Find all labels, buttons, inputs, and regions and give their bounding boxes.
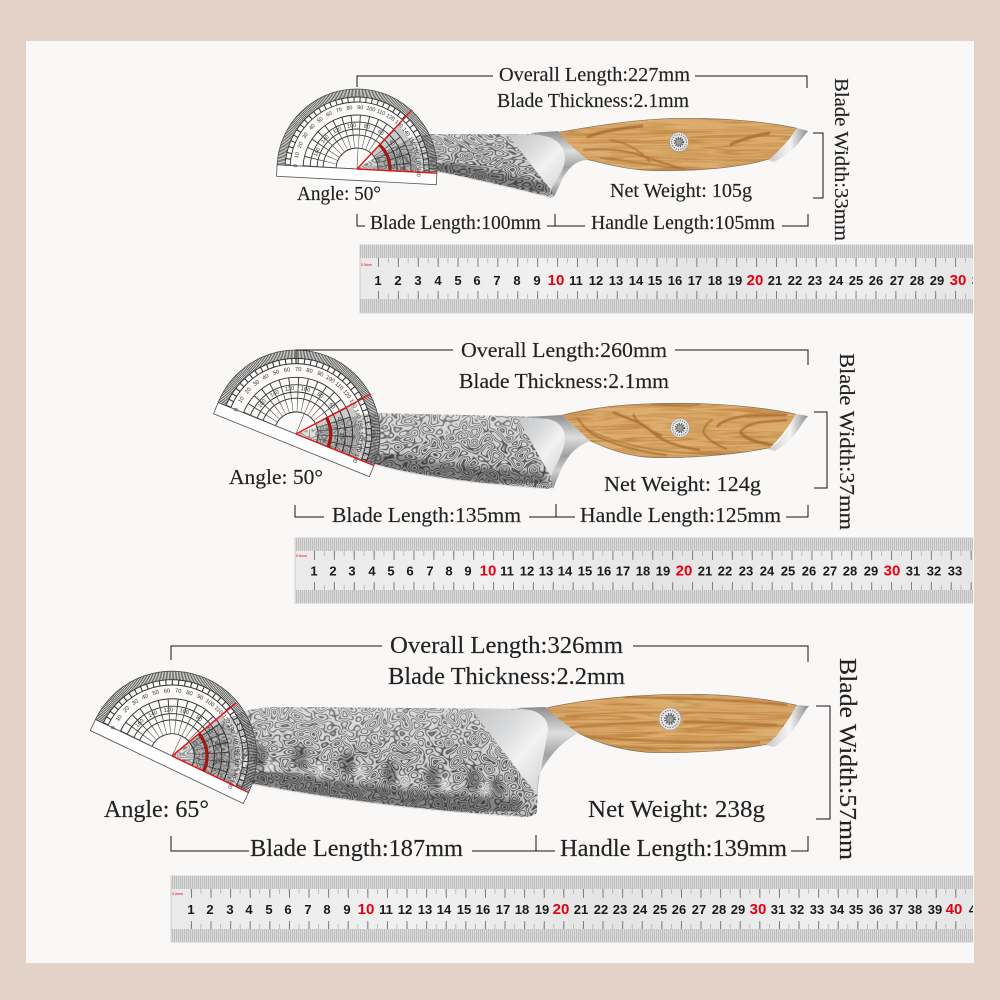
ruler 1: 25	[849, 273, 863, 288]
labels knife 2: Handle Length:125mm	[580, 503, 781, 527]
protractor 1: 40	[308, 123, 317, 132]
protractor 1: 80	[346, 105, 353, 112]
ruler 1: 3	[414, 273, 422, 288]
dimension lines knife 3	[171, 646, 830, 851]
ruler 2: 11	[500, 564, 514, 578]
ruler 3: 10	[358, 901, 374, 918]
protractor 1: 100	[347, 123, 357, 130]
ruler 2: 0.5mm	[296, 554, 307, 558]
ruler 3: 19	[535, 902, 549, 917]
handle 3 wood	[545, 694, 797, 753]
ruler 3: 8	[323, 902, 331, 917]
ruler 1: 22	[788, 273, 802, 288]
ruler 3: 2	[206, 902, 214, 917]
ruler 1: 17	[688, 273, 702, 288]
protractor 2: 20	[244, 387, 253, 396]
ruler 1: 11	[569, 273, 583, 288]
ruler 3: 13	[418, 902, 432, 917]
ruler 1: 1	[374, 273, 382, 288]
labels knife 2: Net Weight: 124g	[604, 472, 761, 496]
ruler 2: 18	[636, 564, 650, 578]
protractor 2	[214, 325, 405, 477]
protractor 3: 30	[131, 698, 140, 707]
ruler 1	[360, 245, 986, 313]
protractor 3: 70	[175, 688, 182, 695]
ruler 3: 16	[476, 902, 490, 917]
ruler 2: 19	[656, 564, 670, 578]
protractor 2: 120	[285, 386, 295, 393]
ruler 2: 1	[310, 564, 318, 578]
protractor 2: 180	[351, 452, 360, 463]
ruler 3: 38	[908, 902, 922, 917]
rivet 3	[659, 708, 681, 730]
ruler 2: 16	[597, 564, 611, 578]
ruler 3: 35	[849, 902, 863, 917]
ruler 2	[295, 538, 974, 603]
ruler 2: 9	[464, 564, 472, 578]
protractor 2: 100	[324, 375, 336, 385]
polished steel 3	[470, 708, 548, 795]
labels knife 1: Handle Length:105mm	[591, 212, 775, 234]
labels knife 1: Blade Width:33mm	[830, 78, 852, 241]
labels knife 3: Blade Thickness:2.2mm	[388, 664, 625, 690]
protractor 2: 50	[272, 369, 280, 377]
ruler 2: 21	[698, 564, 712, 578]
labels knife 2: Angle: 50°	[229, 465, 323, 489]
ruler 3: 26	[672, 902, 686, 917]
ruler 2: 23	[739, 564, 753, 578]
labels knife 2: Blade Width:37mm	[835, 353, 859, 530]
ruler 3	[171, 876, 983, 942]
protractor 2: 130	[348, 398, 357, 410]
protractor 2: 40	[262, 373, 270, 382]
ruler 1: 14	[629, 273, 644, 288]
ruler 1: 29	[930, 273, 944, 288]
protractor 2: 120	[341, 389, 352, 400]
protractor 3: 90	[196, 694, 204, 702]
ruler 2: 6	[406, 564, 414, 578]
protractor 1: 80	[363, 124, 370, 131]
ruler 2: 14	[558, 564, 573, 578]
protractor 1: 180	[415, 168, 421, 177]
labels knife 1: Blade Thickness:2.1mm	[497, 90, 689, 112]
ruler 1: 13	[609, 273, 623, 288]
ruler 3: 7	[304, 902, 312, 917]
protractor 2: 70	[295, 367, 301, 373]
protractor 3: 0	[110, 725, 117, 731]
ruler 3: 25	[653, 902, 667, 917]
protractor 3: 110	[213, 705, 223, 716]
labels knife 3: Net Weight: 238g	[588, 797, 765, 823]
protractor 1: 140	[401, 127, 411, 138]
protractor 2: 80	[306, 368, 313, 375]
ruler 2: 7	[426, 564, 434, 578]
ruler 3: 28	[712, 902, 726, 917]
ruler 1: 16	[668, 273, 682, 288]
ruler 2: 27	[823, 564, 837, 578]
protractor 3	[90, 643, 285, 804]
ruler 3: 36	[869, 902, 883, 917]
protractor 2: 100	[300, 386, 311, 394]
rivet 1	[670, 132, 688, 152]
ruler 3: 12	[398, 902, 412, 917]
ruler 1: 5	[454, 273, 462, 288]
ruler 2: 25	[781, 564, 795, 578]
labels knife 2	[229, 338, 859, 530]
ruler 3: 22	[594, 902, 608, 917]
ruler 3: 4	[245, 902, 253, 917]
protractor 3: 140	[148, 710, 159, 719]
protractor 2: 140	[353, 409, 361, 420]
handle 2 wood	[562, 403, 796, 458]
protractor 3: 130	[226, 724, 235, 735]
protractor 1: 100	[366, 106, 376, 113]
ruler 1: 0.5mm	[361, 263, 372, 267]
ruler 2: 2	[329, 564, 337, 578]
protractor 3: 100	[179, 708, 190, 716]
protractor 1: 140	[320, 134, 331, 145]
ruler 2: 13	[539, 564, 553, 578]
ruler 2: 33	[948, 564, 962, 578]
protractor 1: 160	[411, 146, 420, 156]
labels knife 2: Blade Thickness:2.1mm	[459, 369, 669, 393]
ruler 2: 26	[802, 564, 816, 578]
protractor 1: 10	[294, 152, 301, 159]
angle marker 1	[357, 107, 440, 173]
ruler 1: 27	[890, 273, 904, 288]
ruler 3: 21	[574, 902, 588, 917]
protractor 3: 100	[204, 698, 215, 709]
ruler 2: 8	[445, 564, 453, 578]
protractor 1: 60	[376, 129, 385, 137]
ruler 2: 32	[927, 564, 941, 578]
butt cap 1	[768, 128, 808, 162]
ruler 2: 20	[676, 562, 692, 580]
ruler 2: 17	[616, 564, 630, 578]
ruler 1: 20	[747, 272, 763, 289]
ruler 2: 30	[884, 562, 900, 580]
protractor 1: 160	[313, 147, 322, 158]
protractor 2: 40	[335, 416, 343, 424]
protractor 1: 40	[387, 139, 396, 147]
labels knife 3: Blade Length:187mm	[250, 836, 463, 862]
ruler 1: 21	[768, 273, 782, 288]
angle marker 3	[172, 688, 281, 793]
protractor 1: 70	[335, 107, 343, 114]
ruler 1: 2	[394, 273, 402, 288]
bolster 3	[515, 707, 578, 795]
butt cap 2	[768, 414, 808, 451]
protractor 2: 90	[316, 371, 324, 379]
ruler 1: 30	[950, 272, 966, 289]
protractor 1: 170	[414, 157, 421, 166]
ruler 1: 10	[548, 272, 564, 289]
protractor 3: 60	[164, 688, 170, 695]
protractor 2: 60	[284, 367, 291, 374]
rivet 2	[670, 418, 690, 438]
ruler 3: 3	[226, 902, 234, 917]
blade 1 damascus	[358, 134, 565, 198]
bolster 2	[525, 415, 590, 489]
protractor 3: 60	[205, 726, 214, 735]
labels knife 3: Handle Length:139mm	[560, 836, 787, 862]
labels knife 3: Overall Length:326mm	[390, 633, 623, 659]
ruler 3: 29	[731, 902, 745, 917]
ruler 2: 4	[368, 564, 376, 578]
ruler 3: 17	[496, 902, 510, 917]
polished steel 2	[517, 417, 565, 477]
ruler 3: 11	[379, 902, 393, 917]
protractor 2: 160	[357, 431, 363, 441]
dimension lines knife 2	[295, 350, 827, 517]
ruler 1: 24	[829, 273, 844, 288]
protractor 2: 110	[333, 381, 344, 392]
labels knife 1: Angle: 50°	[297, 183, 381, 205]
ruler 3: 20	[553, 901, 569, 918]
ruler 3: 9	[343, 902, 351, 917]
ruler 3: 40	[946, 901, 962, 918]
ruler 1: 4	[434, 273, 442, 288]
protractor 1	[277, 85, 441, 185]
ruler 1: 8	[513, 273, 521, 288]
labels knife 1: Net Weight: 105g	[610, 180, 752, 202]
protractor 2: 160	[257, 398, 268, 409]
ruler 3: 32	[790, 902, 804, 917]
protractor 1: 30	[302, 132, 310, 140]
protractor 3: 50	[152, 690, 160, 697]
ruler 3: 41	[969, 902, 983, 917]
protractor 3: 40	[212, 741, 220, 748]
protractor 3: 150	[233, 746, 240, 756]
knife 1: paring knife	[358, 118, 808, 198]
labels knife 2: Overall Length:260mm	[461, 338, 667, 362]
protractor 2: 30	[252, 379, 261, 388]
ruler 3: 34	[830, 902, 845, 917]
protractor 3: 180	[226, 778, 235, 789]
ruler 3: 23	[613, 902, 627, 917]
protractor 1: 110	[376, 108, 386, 117]
ruler 1: 26	[869, 273, 883, 288]
angle marker 2	[296, 374, 398, 465]
ruler 1: 15	[648, 273, 662, 288]
ruler 2: 5	[387, 564, 395, 578]
protractor 1: 20	[297, 141, 305, 149]
protractor 3: 170	[230, 768, 238, 779]
labels knife 3: Blade Width:57mm	[834, 658, 860, 860]
protractor 1: 20	[394, 153, 402, 160]
protractor 2: 60	[327, 402, 336, 411]
ruler 3: 1	[187, 902, 195, 917]
protractor 3: 120	[220, 714, 230, 725]
ruler 1: 7	[493, 273, 501, 288]
ruler 3: 6	[284, 902, 292, 917]
ruler 3: 27	[692, 902, 706, 917]
protractor 2: 10	[238, 396, 246, 404]
protractor 1: 0	[293, 164, 299, 167]
ruler 2: 12	[520, 564, 534, 578]
ruler 2: 28	[843, 564, 857, 578]
protractor 3: 80	[185, 690, 193, 697]
ruler 2: 22	[718, 564, 732, 578]
protractor 2: 0	[233, 407, 240, 413]
protractor 3: 80	[194, 715, 203, 723]
ruler 2: 24	[760, 564, 775, 578]
knife 3: santoku knife	[165, 690, 809, 825]
protractor 2: 170	[355, 442, 363, 453]
ruler 2: 29	[864, 564, 878, 578]
protractor 2: 150	[356, 420, 363, 430]
ruler 1: 18	[708, 273, 722, 288]
ruler 3: 37	[889, 902, 903, 917]
protractor 1: 60	[325, 111, 333, 119]
ruler 3: 0.5mm	[172, 892, 183, 896]
knife 2: utility knife	[298, 403, 808, 489]
labels knife 1	[297, 64, 852, 241]
protractor 3: 20	[214, 757, 221, 764]
ruler 1: 28	[910, 273, 924, 288]
labels knife 3: Angle: 65°	[104, 797, 209, 823]
dimension lines knife 1	[357, 76, 823, 226]
bolster 1	[530, 131, 588, 197]
labels knife 1: Blade Length:100mm	[370, 212, 541, 234]
labels knife 3	[104, 633, 860, 862]
ruler 3: 14	[437, 902, 452, 917]
butt cap 3	[766, 705, 809, 747]
labels knife 1: Overall Length:227mm	[499, 64, 690, 86]
polished steel 1	[507, 134, 565, 190]
ruler 2: 10	[480, 562, 496, 580]
protractor 3: 10	[115, 714, 124, 723]
ruler 1: 31	[972, 273, 986, 288]
protractor 1: 90	[357, 105, 363, 111]
protractor 3: 160	[233, 757, 240, 767]
ruler 3: 30	[750, 901, 766, 918]
ruler 1: 23	[808, 273, 822, 288]
protractor 3: 40	[141, 693, 149, 701]
ruler 3: 5	[265, 902, 273, 917]
protractor 2: 140	[269, 389, 280, 399]
labels knife 2: Blade Length:135mm	[332, 503, 521, 527]
protractor 3: 120	[163, 707, 173, 714]
protractor 1: 120	[385, 113, 396, 123]
ruler 3: 18	[515, 902, 529, 917]
ruler 3: 24	[633, 902, 648, 917]
protractor 2: 80	[316, 392, 324, 400]
ruler 1: 12	[589, 273, 603, 288]
ruler 1: 9	[533, 273, 541, 288]
ruler 2: 15	[578, 564, 592, 578]
protractor 1: 120	[332, 126, 343, 135]
ruler 3: 33	[810, 902, 824, 917]
ruler 3: 15	[457, 902, 471, 917]
ruler 3: 39	[928, 902, 942, 917]
protractor 3: 160	[135, 718, 146, 729]
protractor 3: 140	[230, 734, 239, 745]
blade 2 damascus	[298, 413, 565, 489]
ruler 2: 31	[906, 564, 920, 578]
ruler 1: 19	[728, 273, 742, 288]
protractor 1: 50	[316, 116, 324, 124]
protractor 1: 130	[393, 119, 404, 130]
handle 1 wood	[558, 118, 797, 171]
ruler 2: 3	[348, 564, 356, 578]
blade 3 damascus	[173, 707, 538, 818]
protractor 2: 20	[338, 432, 344, 439]
ruler 3: 31	[771, 902, 785, 917]
ruler 1: 6	[473, 273, 481, 288]
protractor 3: 20	[122, 706, 131, 714]
protractor 1: 150	[407, 136, 416, 147]
